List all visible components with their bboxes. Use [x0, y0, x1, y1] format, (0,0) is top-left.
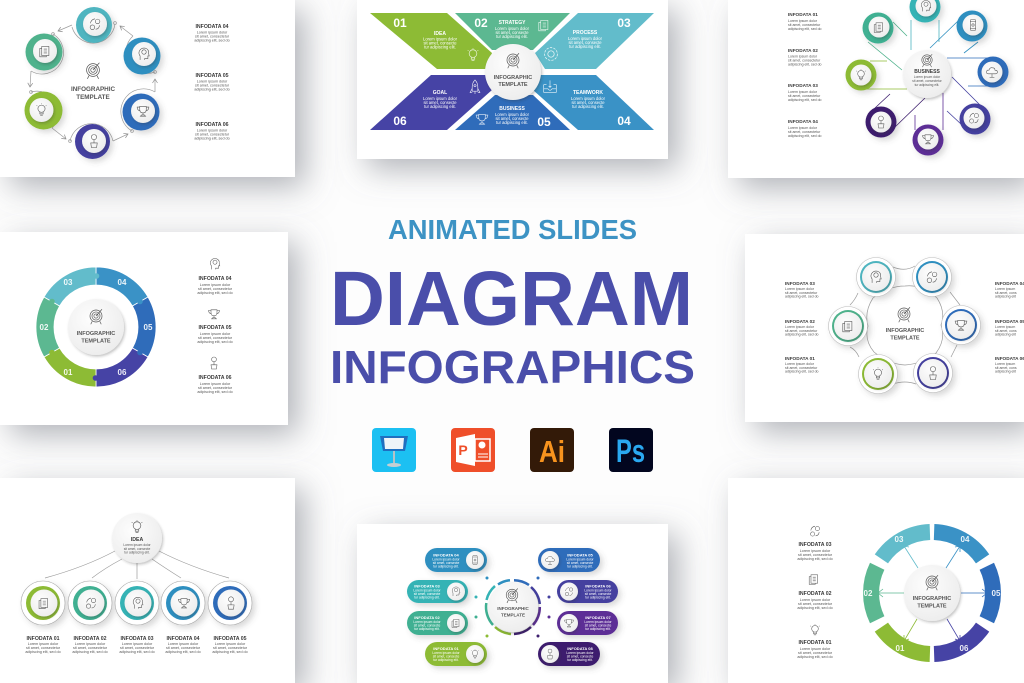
text: infodata with icons: sit amet, consectetur	[798, 553, 833, 557]
text: infodata 04 to 06 with icons: Lorem ipsum dolor	[200, 382, 231, 386]
panel: six arrow shapes	[357, 0, 668, 159]
left pills: INFODATA 03	[414, 584, 441, 588]
hub idea: IDEA	[131, 537, 143, 543]
center disc: TEMPLATE	[498, 82, 528, 88]
right pills: sit amet, consecte	[585, 592, 611, 596]
text: infodata 01 to 04: INFODATA 04	[788, 119, 818, 124]
text: infodata with icons: INFODATA 03	[798, 542, 832, 548]
segment 05 business	[455, 95, 570, 130]
center disc: INFOGRAPHIC	[913, 596, 951, 602]
segment 01 idea: Lorem ipsum dolor	[423, 36, 458, 42]
center label	[886, 307, 924, 342]
segment 04 teamwork: sit amet, consecte	[572, 100, 605, 105]
icon: illustrator: Ai	[539, 434, 565, 469]
text: infodata 01 to 05	[25, 636, 248, 654]
segment 06 goal: sit amet, consecte	[424, 100, 457, 105]
ring segments	[871, 532, 993, 654]
text: infodata 04 to 06: adipiscing elit, sed do	[194, 38, 230, 42]
text: infodata right column: Lorem ipsum	[995, 362, 1015, 366]
center disc	[488, 582, 538, 632]
text: infodata left column: Lorem ipsum dolor	[785, 325, 815, 329]
segment 02 strategy: STRATEGY	[499, 20, 526, 26]
center label: TEMPLATE	[76, 94, 110, 101]
panel: puzzle ring	[0, 232, 288, 425]
text: infodata 04 to 06 with icons: INFODATA 06	[198, 375, 232, 381]
center disc: INFOGRAPHIC	[497, 606, 530, 611]
text: infodata left column: Lorem ipsum dolor	[785, 287, 815, 291]
text: infodata 04 to 06: sit amet, consectetur	[195, 132, 230, 136]
text: infodata 01 to 05: Lorem ipsum dolor	[28, 642, 59, 646]
text: infodata 04 to 06: INFODATA 06	[195, 122, 229, 128]
right pills: Lorem ipsum dolor	[566, 558, 595, 562]
text: infodata 01 to 05: Lorem ipsum dolor	[215, 642, 246, 646]
hub idea: sit amet, consecte	[124, 547, 150, 551]
text: infodata 01 to 05: sit amet, consectetur	[213, 646, 248, 650]
text: infodata 01 to 05: sit amet, consectetur	[73, 646, 108, 650]
text: infodata right column: INFODATA 06	[995, 356, 1024, 361]
text: infodata right column: adipiscing elit	[995, 294, 1016, 298]
right pills: INFODATA 05	[567, 552, 594, 558]
center label: INFOGRAPHIC	[71, 86, 115, 93]
text: infodata right column: Lorem ipsum	[995, 325, 1015, 329]
text: infodata left column: adipiscing elit, sed do	[785, 294, 819, 298]
text: infodata 01 to 05: adipiscing elit, sed do	[212, 650, 248, 654]
ring numbers: 03	[895, 535, 904, 544]
text: infodata 01 to 05: adipiscing elit, sed do	[119, 650, 155, 654]
text: infodata 04 to 06	[194, 24, 230, 140]
icon: powerpoint: P	[458, 442, 468, 458]
text: infodata 04 to 06 with icons	[197, 258, 233, 394]
segment 01 idea: tur adipiscing elit.	[424, 44, 456, 50]
panel: radial eight circles	[728, 0, 1024, 178]
center disc: INFOGRAPHIC	[77, 331, 115, 337]
text: infodata 01 to 04	[788, 12, 822, 138]
text: infodata with icons: INFODATA 02	[798, 591, 832, 597]
center label: TEMPLATE	[890, 336, 920, 342]
text: infodata 04 to 06 with icons: INFODATA 05	[198, 325, 232, 331]
segment 01 idea: 01	[393, 16, 407, 30]
flowing outline	[850, 266, 960, 384]
text: infodata 01 to 05: INFODATA 04	[166, 636, 200, 642]
panel: idea hierarchy	[0, 478, 295, 683]
segment 05 business: tur adipiscing elit.	[496, 120, 528, 125]
center disc business: BUSINESS	[914, 69, 940, 75]
segment 04 teamwork: tur adipiscing elit.	[572, 104, 604, 109]
segment 06 goal: 06	[393, 114, 407, 128]
right pills: tur adipiscing elit.	[567, 564, 593, 568]
right pills: INFODATA 07	[585, 615, 612, 620]
text: infodata 01 to 05: INFODATA 03	[120, 636, 154, 642]
segment 01 idea: IDEA	[434, 31, 446, 37]
hub idea: tur adipiscing elit.	[124, 550, 150, 554]
text: infodata 01 to 04: adipiscing elit, sed do	[788, 134, 822, 138]
text: infodata 01 to 04: INFODATA 02	[788, 48, 818, 53]
text: infodata 04 to 06: adipiscing elit, sed do	[194, 136, 230, 140]
text: infodata 04 to 06 with icons: sit amet, consectetur	[198, 287, 233, 291]
left pills: Lorem ipsum dolor	[413, 620, 442, 624]
arrows	[878, 546, 987, 641]
text: infodata with icons: Lorem ipsum dolor	[800, 598, 831, 602]
text: infodata 04 to 06 with icons: adipiscing elit, sed do	[197, 390, 233, 394]
segment 02 strategy: tur adipiscing elit.	[496, 34, 528, 39]
icon: illustrator	[530, 428, 574, 472]
text: infodata with icons: adipiscing elit, sed do	[797, 557, 833, 561]
segment 02 strategy: sit amet, consecte	[496, 30, 529, 35]
text: infodata with icons: adipiscing elit, sed do	[797, 606, 833, 610]
text: infodata with icons: Lorem ipsum dolor	[800, 647, 831, 651]
text: infodata with icons: sit amet, consectetur	[798, 602, 833, 606]
text: infodata 04 to 06: sit amet, consectetur	[195, 34, 230, 38]
segment 05 business: Lorem ipsum dolor	[495, 112, 530, 117]
icon circles	[24, 7, 160, 159]
segment 03 process: 03	[617, 16, 631, 30]
left pills	[407, 548, 487, 666]
ring numbers	[864, 535, 1001, 653]
center disc business: Lorem ipsum dolor	[914, 75, 941, 79]
center disc: TEMPLATE	[917, 604, 947, 610]
left pills: sit amet, consecte	[414, 592, 440, 596]
text: infodata 04 to 06: Lorem ipsum dolor	[197, 128, 228, 132]
left pills: INFODATA 04	[433, 552, 460, 558]
left pills: tur adipiscing elit.	[414, 627, 440, 631]
segment 03 process	[535, 13, 654, 69]
text: infodata 01 to 05: adipiscing elit, sed do	[25, 650, 61, 654]
text: infodata right column: sit amet, cons	[995, 291, 1017, 295]
ring numbers: 04	[961, 535, 970, 544]
right pills: INFODATA 06	[585, 584, 612, 588]
text: infodata left column: INFODATA 02	[785, 319, 815, 324]
right pills: sit amet, consecte	[585, 624, 611, 628]
ring numbers	[40, 278, 153, 377]
text: infodata right column	[995, 281, 1024, 374]
text: infodata 01 to 04: sit amet, consectetur	[788, 94, 821, 98]
text: infodata 04 to 06: Lorem ipsum dolor	[197, 30, 228, 34]
segment 01 idea: sit amet, consecte	[424, 40, 457, 46]
left pills: sit amet, consecte	[414, 624, 440, 628]
text: infodata 01 to 05: Lorem ipsum dolor	[75, 642, 106, 646]
panel: eight pills	[357, 524, 668, 683]
segment 05 business: BUSINESS	[499, 106, 525, 112]
left pills: Lorem ipsum dolor	[432, 558, 461, 562]
panel: segmented ring with arrows	[728, 478, 1024, 683]
center disc	[68, 299, 124, 355]
segment 04 teamwork: 04	[617, 114, 631, 128]
text: infodata 04 to 06: INFODATA 04	[195, 24, 229, 30]
segment 02 strategy: 02	[474, 16, 488, 30]
ring numbers: 02	[864, 589, 873, 598]
text: infodata with icons	[797, 526, 833, 659]
icon circles	[21, 581, 252, 625]
segment 04 teamwork	[533, 75, 654, 130]
segment 02 strategy: Lorem ipsum dolor	[495, 26, 530, 31]
center label	[71, 63, 115, 101]
text: infodata with icons: INFODATA 01	[798, 640, 832, 646]
ring numbers: 05	[992, 589, 1001, 598]
right pills: Lorem ipsum dolor	[566, 651, 595, 655]
text: infodata 01 to 04: Lorem ipsum dolor	[788, 126, 818, 130]
text: infodata left column: Lorem ipsum dolor	[785, 362, 815, 366]
arc and arrow connectors	[30, 22, 156, 142]
segment 04 teamwork: TEAMWORK	[573, 90, 603, 96]
segmented center ring	[486, 580, 540, 634]
text: infodata left column: sit amet, consectetur	[785, 329, 818, 333]
text: infodata 01 to 04: Lorem ipsum dolor	[788, 90, 818, 94]
text: infodata 01 to 05: Lorem ipsum dolor	[122, 642, 153, 646]
text: infodata right column: INFODATA 05	[995, 319, 1024, 324]
right pills: tur adipiscing elit.	[567, 658, 593, 662]
ring numbers: 02	[40, 323, 49, 332]
left pills: tur adipiscing elit.	[433, 658, 459, 662]
icon: keynote	[372, 428, 416, 472]
ring segments	[36, 267, 156, 387]
text: infodata 04 to 06 with icons: adipiscing elit, sed do	[197, 291, 233, 295]
text: infodata 04 to 06 with icons: sit amet, consectetur	[198, 336, 233, 340]
text: infodata with icons: sit amet, consectetur	[798, 651, 833, 655]
text: infodata left column	[785, 281, 819, 374]
text: infodata 04 to 06 with icons: INFODATA 04	[198, 276, 232, 282]
text: infodata left column: sit amet, consectetur	[785, 366, 818, 370]
connector lines	[45, 551, 229, 579]
text: infodata left column: INFODATA 03	[785, 281, 815, 286]
text: infodata 01 to 04: sit amet, consectetur	[788, 130, 821, 134]
text: infodata 04 to 06: INFODATA 05	[195, 73, 229, 79]
connector lines	[858, 20, 988, 130]
left pills: Lorem ipsum dolor	[432, 651, 461, 655]
center disc	[904, 565, 960, 621]
text: infodata left column: adipiscing elit, sed do	[785, 332, 819, 336]
text: infodata 01 to 04: Lorem ipsum dolor	[788, 54, 818, 58]
text: infodata 01 to 04: INFODATA 01	[788, 12, 818, 17]
ring numbers: 06	[118, 368, 127, 377]
segment 06 goal: Lorem ipsum dolor	[423, 96, 458, 101]
text: infodata 01 to 05: INFODATA 02	[73, 636, 107, 642]
center disc	[485, 44, 541, 100]
text: infodata 01 to 04: Lorem ipsum dolor	[788, 19, 818, 23]
icon: photoshop: Ps	[616, 433, 645, 469]
text: infodata right column: sit amet, cons	[995, 329, 1017, 333]
text: infodata 01 to 05: adipiscing elit, sed do	[72, 650, 108, 654]
segment 01 idea	[370, 13, 492, 69]
segment 02 strategy	[455, 13, 570, 50]
left pills: INFODATA 02	[414, 615, 441, 620]
right pills	[538, 548, 618, 666]
ring numbers: 03	[64, 278, 73, 287]
panel: circular arrows diagram	[0, 0, 295, 177]
text: infodata right column: adipiscing elit	[995, 370, 1016, 374]
text: infodata 01 to 04: INFODATA 03	[788, 83, 818, 88]
left pills: tur adipiscing elit.	[414, 596, 440, 600]
icon circles	[828, 258, 980, 394]
text: infodata 01 to 05: sit amet, consectetur	[120, 646, 155, 650]
text: infodata 01 to 04: sit amet, consectetur	[788, 58, 821, 62]
icon: photoshop	[609, 428, 653, 472]
text: infodata left column: adipiscing elit, sed do	[785, 370, 819, 374]
right pills: tur adipiscing elit.	[585, 627, 611, 631]
text: infodata left column: INFODATA 01	[785, 356, 815, 361]
segment 03 process: PROCESS	[573, 30, 598, 36]
text: infodata 01 to 04: adipiscing elit, sed do	[788, 62, 822, 66]
text: infodata 01 to 04: sit amet, consectetur	[788, 23, 821, 27]
right pills: sit amet, consecte	[567, 654, 593, 658]
ring numbers: 05	[144, 323, 153, 332]
icon: powerpoint	[451, 428, 495, 472]
center disc: TEMPLATE	[501, 612, 525, 618]
text: infodata 01 to 05: INFODATA 05	[213, 636, 247, 642]
left pills: sit amet, consecte	[433, 561, 459, 565]
center label: INFOGRAPHIC	[886, 328, 924, 334]
center disc: INFOGRAPHIC	[494, 75, 532, 81]
text: infodata 01 to 05: sit amet, consectetur	[166, 646, 201, 650]
ring numbers: 04	[118, 278, 127, 287]
segment 06 goal: GOAL	[433, 90, 447, 96]
right pills: sit amet, consecte	[567, 561, 593, 565]
left pills: tur adipiscing elit.	[433, 564, 459, 568]
text: infodata 01 to 05: adipiscing elit, sed do	[165, 650, 201, 654]
title: diagram: DIAGRAM	[330, 256, 693, 342]
icon circles	[846, 0, 1008, 156]
text: infodata 04 to 06: Lorem ipsum dolor	[197, 80, 228, 84]
left pills: sit amet, consecte	[433, 654, 459, 658]
text: infodata 04 to 06 with icons: Lorem ipsum dolor	[200, 332, 231, 336]
hub idea	[112, 513, 162, 563]
center disc business: tur adipiscing elit.	[915, 83, 939, 87]
text: infodata right column: adipiscing elit	[995, 332, 1016, 336]
text: infodata 01 to 05: sit amet, consectetur	[26, 646, 61, 650]
text: infodata 04 to 06 with icons: adipiscing elit, sed do	[197, 340, 233, 344]
hub idea: Lorem ipsum dolor	[123, 543, 152, 547]
right pills: INFODATA 08	[567, 646, 594, 651]
segment 06 goal	[370, 75, 492, 130]
text: infodata 04 to 06 with icons: sit amet, consectetur	[198, 386, 233, 390]
segment 03 process: Lorem ipsum dolor	[568, 36, 603, 41]
panel: hexagonal flower	[745, 234, 1024, 422]
center disc business: sit amet, consectetur	[912, 79, 943, 83]
text: infodata 04 to 06: sit amet, consectetur	[195, 84, 230, 88]
text: infodata 04 to 06 with icons: Lorem ipsum dolor	[200, 283, 231, 287]
segment 05 business: 05	[537, 115, 551, 129]
ring numbers: 01	[896, 644, 905, 653]
left pills: INFODATA 01	[433, 646, 460, 651]
segment 03 process: sit amet, consecte	[568, 40, 602, 45]
right pills: Lorem ipsum dolor	[584, 588, 613, 592]
subtitle: animated slides: ANIMATED SLIDES	[388, 214, 637, 245]
text: infodata 01 to 04: adipiscing elit, sed do	[788, 27, 822, 31]
ring numbers: 06	[960, 644, 969, 653]
text: infodata 04 to 06: adipiscing elit, sed do	[194, 88, 230, 92]
text: infodata 01 to 05: INFODATA 01	[26, 636, 60, 642]
left pills: Lorem ipsum dolor	[413, 588, 442, 592]
center disc business	[903, 50, 951, 98]
text: infodata with icons: adipiscing elit, sed do	[797, 655, 833, 659]
segment 04 teamwork: Lorem ipsum dolor	[571, 96, 606, 101]
center disc: TEMPLATE	[81, 338, 111, 344]
segment 06 goal: tur adipiscing elit.	[424, 104, 456, 109]
text: infodata right column: INFODATA 04	[995, 281, 1024, 286]
right pills: Lorem ipsum dolor	[584, 620, 613, 624]
right pills: tur adipiscing elit.	[585, 596, 611, 600]
text: infodata 01 to 05: Lorem ipsum dolor	[168, 642, 199, 646]
ring numbers: 01	[64, 368, 73, 377]
segment 05 business: sit amet, consecte	[496, 116, 529, 121]
text: infodata right column: sit amet, cons	[995, 366, 1017, 370]
text: infodata right column: Lorem ipsum	[995, 287, 1015, 291]
connector dots	[474, 576, 550, 638]
segment 03 process: tur adipiscing elit.	[569, 44, 601, 49]
text: infodata with icons: Lorem ipsum dolor	[800, 549, 831, 553]
text: infodata left column: sit amet, consectetur	[785, 291, 818, 295]
text: infodata 01 to 04: adipiscing elit, sed do	[788, 98, 822, 102]
title: infographics: INFOGRAPHICS	[330, 341, 695, 393]
